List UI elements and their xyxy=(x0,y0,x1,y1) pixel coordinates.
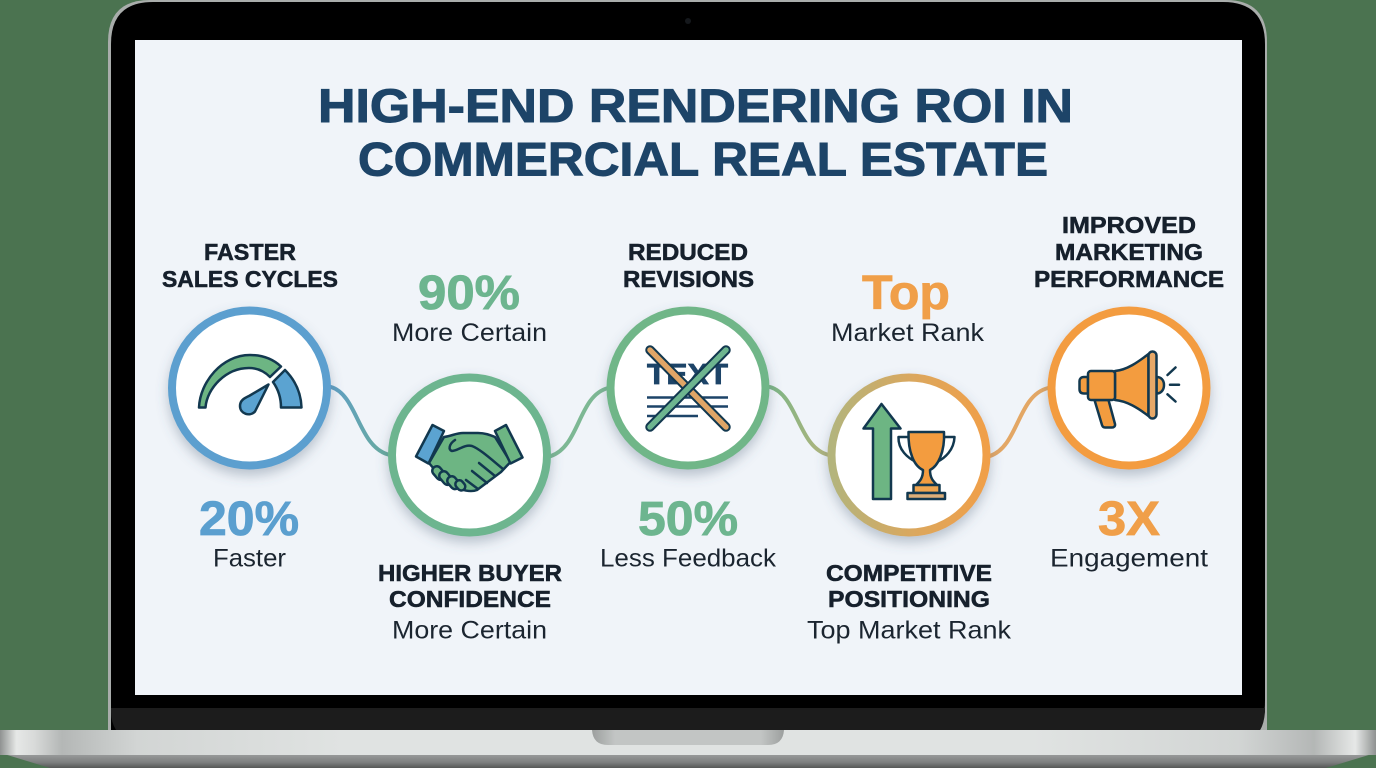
stat label: Engagement xyxy=(1050,544,1208,572)
lower base lip xyxy=(4,754,1372,768)
stat label: Less Feedback xyxy=(600,544,777,572)
connector lines xyxy=(331,387,1048,456)
stat: 90%: 90% xyxy=(418,267,520,320)
heading xyxy=(162,239,338,292)
webcam xyxy=(685,18,691,24)
icon: speedometer gauge xyxy=(199,355,302,414)
sub label: More Certain xyxy=(392,616,547,644)
icon: megaphone xyxy=(1080,352,1179,428)
step 1: faster sales cycles xyxy=(162,239,338,572)
heading: SALES CYCLES xyxy=(162,266,338,292)
heading: CONFIDENCE xyxy=(389,586,551,612)
screen bezel xyxy=(111,2,1265,730)
title: HIGH-END RENDERING ROI IN xyxy=(318,80,1073,133)
sub label: Top Market Rank xyxy=(807,616,1012,644)
heading: REVISIONS xyxy=(623,266,754,292)
stat label: Faster xyxy=(213,544,286,572)
circle xyxy=(392,378,547,532)
circle xyxy=(172,310,327,466)
stat: top: Top xyxy=(862,267,950,320)
step 2: higher buyer confidence xyxy=(378,267,562,644)
stat: 20%: 20% xyxy=(199,493,299,546)
heading: MARKETING xyxy=(1055,239,1203,265)
heading xyxy=(623,239,754,292)
title: COMMERCIAL REAL ESTATE xyxy=(358,134,1048,186)
heading xyxy=(826,560,992,612)
base deck xyxy=(0,730,1376,755)
icon: crossed-out text: TEXT xyxy=(647,359,728,391)
stat: 50%: 50% xyxy=(638,493,738,546)
trackpad notch xyxy=(592,730,784,745)
heading: FASTER xyxy=(204,239,296,265)
heading xyxy=(378,560,562,612)
heading: POSITIONING xyxy=(828,586,990,612)
heading: HIGHER BUYER xyxy=(378,560,562,586)
bezel chin xyxy=(111,708,1265,730)
stat label: More Certain xyxy=(392,319,547,347)
step 4: competitive positioning xyxy=(807,267,1012,644)
circle xyxy=(1052,310,1206,466)
stat: 3X: 3X xyxy=(1098,493,1160,546)
step 5: improved marketing performance xyxy=(1034,212,1224,572)
icon: handshake xyxy=(416,425,522,492)
title xyxy=(318,80,1073,186)
heading: COMPETITIVE xyxy=(826,560,992,586)
circle xyxy=(832,378,986,532)
icon: arrow and trophy xyxy=(864,404,954,499)
heading xyxy=(1034,212,1224,292)
icon: crossed-out text xyxy=(647,350,728,427)
stat label: Market Rank xyxy=(831,319,985,347)
screen panel xyxy=(135,40,1242,695)
circle xyxy=(610,310,766,466)
heading: PERFORMANCE xyxy=(1034,266,1224,292)
heading: IMPROVED xyxy=(1062,212,1196,238)
heading: REDUCED xyxy=(628,239,748,265)
step 3: reduced revisions xyxy=(600,239,777,572)
